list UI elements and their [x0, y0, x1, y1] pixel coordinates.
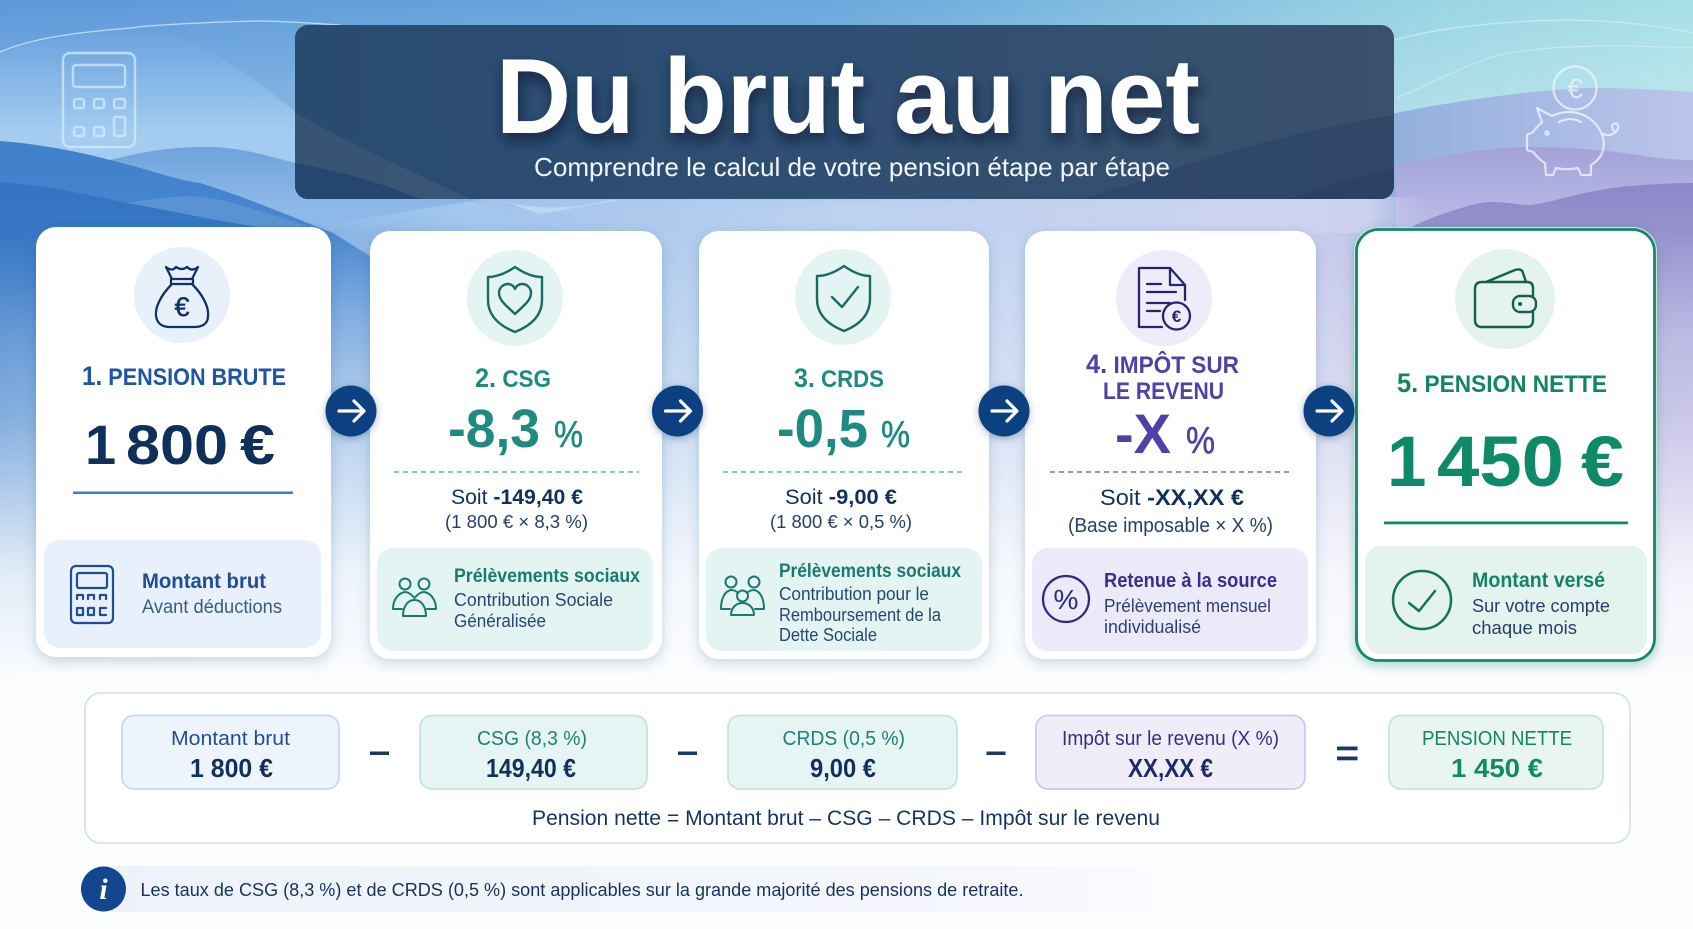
amount: € [1581, 423, 1624, 502]
sub-panel: prelevements CSG [377, 548, 653, 651]
formula box: CSG: CSG (8,3 %) [477, 728, 587, 750]
arrow 3 [978, 386, 1030, 436]
calculation: (1 800 € × 0,5 %) [770, 511, 912, 532]
text: CRDS description: Dette Sociale [779, 625, 877, 645]
heading: 3. CRDS [794, 363, 884, 393]
amount: Soit -149,40 € [451, 486, 583, 509]
rate: % [1186, 420, 1215, 462]
rate: % [554, 414, 583, 455]
arrow 4 [1304, 386, 1354, 436]
heading: 4. IMPÔT SUR [1086, 349, 1247, 379]
icon: calculator watermark [63, 53, 135, 147]
formula box: pension nette [1389, 716, 1603, 789]
icon: tax document: € [1172, 307, 1182, 326]
formula box: montant brut: Montant brut [171, 728, 290, 750]
formula box: CSG: 149,40 € [486, 753, 576, 783]
text: CSG description: Généralisée [454, 611, 546, 631]
amount: 1 [85, 413, 116, 476]
icon: tax document [1116, 250, 1212, 346]
formula box: impot: Impôt sur le revenu (X %) [1062, 728, 1279, 750]
rate: -0,5 [777, 399, 868, 459]
heading: 1. PENSION BRUTE [82, 361, 286, 391]
info note [81, 866, 1156, 912]
heading: 2. CSG [475, 363, 551, 393]
sub-panel: retenue a la source [1032, 548, 1308, 651]
amount: 450 [1437, 423, 1564, 502]
sub-panel: montant brut [44, 540, 321, 648]
text: description: Sur votre compte [1472, 595, 1610, 616]
formula box: CRDS: CRDS (0,5 %) [782, 728, 905, 750]
formula box: pension nette: 1 450 € [1451, 753, 1543, 783]
panel: step 5 pension nette [1354, 227, 1657, 663]
formula box: impot: XX,XX € [1128, 753, 1213, 783]
formula box: pension nette: PENSION NETTE [1422, 728, 1572, 750]
icon: info [81, 866, 126, 912]
formula box: CSG [420, 716, 647, 789]
rate: -X [1115, 402, 1171, 465]
amount: Soit -XX,XX € [1100, 485, 1244, 510]
text: CSG description: Contribution Sociale [454, 590, 613, 610]
background: gradient with waves [0, 0, 1693, 668]
icon: percent circle: % [1054, 584, 1078, 615]
panel: formula [85, 693, 1630, 843]
sub-panel: montant verse [1365, 546, 1647, 654]
text: montant verse: Montant versé [1472, 569, 1605, 592]
amount: 1 [1387, 423, 1426, 502]
icon: info: i [99, 873, 108, 906]
icon: wallet [1455, 249, 1555, 349]
subtitle: Comprendre le calcul de votre pension étape par étape [534, 152, 1170, 182]
text: retenue description: Prélèvement mensuel [1104, 596, 1271, 616]
formula text: Pension nette = Montant brut – CSG – CRDS – Impôt sur le revenu [532, 807, 1160, 830]
operator equals [1337, 746, 1358, 760]
operator minus [370, 752, 389, 755]
text: prelevements sociaux: Prélèvements sociaux [454, 566, 640, 587]
text: description: chaque mois [1472, 617, 1577, 638]
icon: people [393, 578, 436, 616]
panel: step 4 impot sur le revenu [1025, 231, 1316, 659]
icon: money bag [134, 247, 230, 343]
heading: 5. PENSION NETTE [1397, 368, 1607, 398]
note text: Les taux de CSG (8,3 %) et de CRDS (0,5 %) sont applicables sur la grande majorité des pensions de retraite. [140, 879, 1024, 900]
icon: calculator [71, 566, 113, 623]
main title: Du brut au net [496, 36, 1200, 156]
calculation: (1 800 € × 8,3 %) [445, 511, 588, 532]
formula box: impot [1036, 716, 1305, 789]
text: prelevements sociaux: Prélèvements sociaux [779, 561, 961, 582]
icon: piggy bank watermark: € [1567, 73, 1583, 104]
text: retenue description: individualisé [1104, 617, 1201, 637]
formula box: CRDS: 9,00 € [810, 753, 876, 783]
text: CRDS description: Contribution pour le [779, 584, 929, 604]
icon: money bag: € [174, 292, 190, 322]
sub-panel: prelevements CRDS [706, 548, 982, 651]
amount: Soit -9,00 € [785, 486, 897, 509]
icon: piggy bank watermark [1527, 66, 1618, 175]
icon: shield check [795, 249, 891, 345]
formula box: montant brut [122, 716, 339, 789]
operator minus [986, 752, 1006, 755]
title banner [295, 25, 1394, 199]
amount: € [240, 413, 275, 476]
panel: step 2 CSG [370, 231, 662, 659]
icon: shield heart [467, 250, 563, 346]
formula box: CRDS [728, 716, 957, 789]
arrow 1 [326, 386, 376, 436]
icon: percent circle [1043, 576, 1089, 622]
rate: % [881, 414, 910, 455]
icon: check circle [1393, 571, 1451, 629]
text: retenue: Retenue à la source [1104, 570, 1277, 592]
panel: step 1 pension brute [36, 227, 331, 657]
arrow 2 [652, 386, 703, 436]
icon: people group [721, 576, 764, 615]
calculation: (Base imposable × X %) [1068, 515, 1273, 537]
operator minus [678, 752, 697, 755]
rate: -8,3 [448, 399, 540, 459]
panel: step 3 CRDS [699, 231, 989, 659]
text: montant brut: Montant brut [142, 570, 266, 593]
heading: LE REVENU [1103, 378, 1224, 405]
formula box: montant brut: 1 800 € [190, 753, 273, 783]
text: CRDS description: Remboursement de la [779, 605, 942, 625]
text: avant deductions: Avant déductions [142, 597, 282, 618]
amount: 800 [126, 413, 228, 476]
